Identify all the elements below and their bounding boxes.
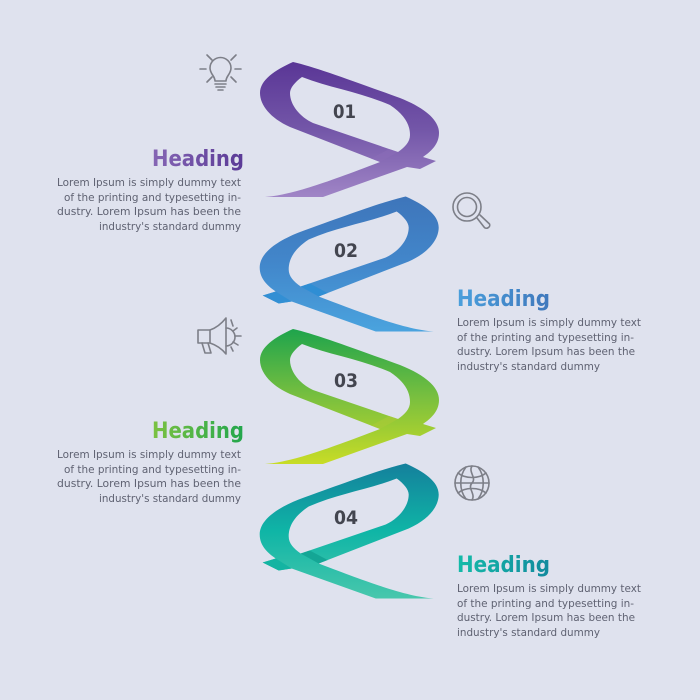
body text 3: industry's standard dummy (99, 493, 241, 505)
body text 3 (57, 449, 241, 505)
body text 1: Lorem Ipsum is simply dummy text (57, 177, 241, 189)
body text 4: Lorem Ipsum is simply dummy text (457, 583, 641, 595)
body text 4: of the printing and typesetting in- (457, 598, 634, 610)
icon: megaphone (198, 318, 241, 354)
body text 3: of the printing and typesetting in- (64, 464, 241, 476)
body text 2: industry's standard dummy (457, 361, 600, 373)
icon: light bulb (200, 55, 241, 90)
number 01: 01 (333, 101, 356, 123)
number 04: 04 (334, 507, 358, 529)
ribbon 4: teal (260, 464, 439, 598)
text block 4 (457, 553, 641, 639)
body text 3: Lorem Ipsum is simply dummy text (57, 449, 241, 461)
body text 4: industry's standard dummy (457, 627, 600, 639)
heading 1: Heading (152, 147, 244, 172)
body text 1: industry's standard dummy (99, 221, 241, 233)
icon: globe (455, 466, 489, 500)
ribbon 2: blue (260, 196, 439, 332)
body text 2: of the printing and typesetting in- (457, 332, 634, 344)
ribbon 3: green (260, 329, 439, 464)
body text 4: dustry. Lorem Ipsum has been the (457, 612, 635, 624)
body text 2: Lorem Ipsum is simply dummy text (457, 317, 641, 329)
body text 1 (57, 177, 241, 233)
body text 3: dustry. Lorem Ipsum has been the (57, 478, 241, 490)
ribbon 1: purple (260, 62, 439, 197)
body text 1: dustry. Lorem Ipsum has been the (57, 206, 241, 218)
text block 2 (457, 287, 641, 373)
text block 1 (57, 147, 244, 233)
heading 2: Heading (457, 287, 550, 312)
body text 1: of the printing and typesetting in- (64, 192, 241, 204)
icon: magnifier (453, 193, 490, 228)
number 02: 02 (334, 240, 358, 262)
heading 3: Heading (152, 419, 244, 444)
text block 3 (57, 419, 244, 505)
body text 4 (457, 583, 641, 639)
number 03: 03 (334, 370, 358, 392)
heading 4: Heading (457, 553, 550, 578)
body text 2: dustry. Lorem Ipsum has been the (457, 346, 635, 358)
body text 2 (457, 317, 641, 373)
